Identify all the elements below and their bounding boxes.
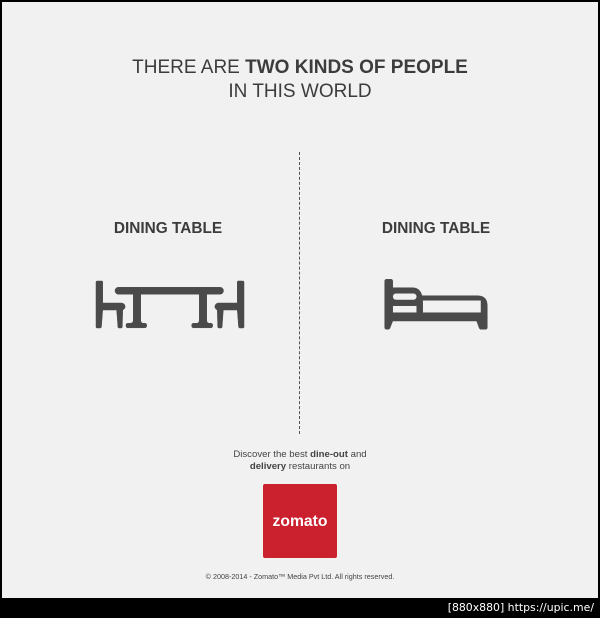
logo wordmark: zomato	[273, 512, 327, 530]
dashed divider	[299, 152, 300, 434]
title: IN THIS WORLD	[228, 81, 372, 102]
icon: bed	[384, 279, 488, 330]
title	[132, 57, 468, 102]
title: THERE ARE TWO KINDS OF PEOPLE	[132, 57, 468, 78]
discover text: Discover the best dine-out and	[233, 448, 367, 460]
right heading: DINING TABLE	[382, 220, 490, 237]
icon: table with chairs	[96, 280, 244, 328]
left heading: DINING TABLE	[114, 220, 222, 237]
discover text	[233, 448, 367, 472]
zomato logo	[263, 484, 337, 558]
copyright: © 2008-2014 - Zomato™ Media Pvt Ltd. All rights reserved.	[206, 572, 394, 580]
watermark: [880x880] https://upic.me/	[448, 601, 594, 614]
discover text: delivery restaurants on	[250, 461, 350, 472]
